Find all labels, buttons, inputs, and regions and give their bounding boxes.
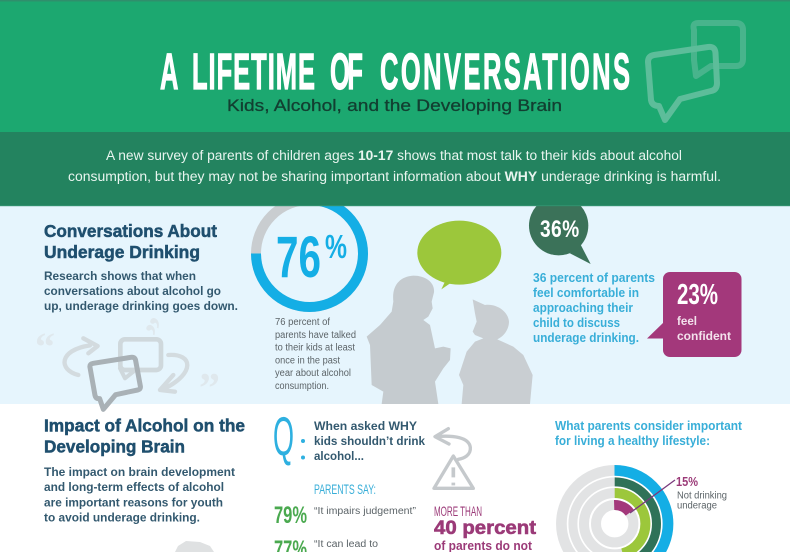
icon: green speech bubble: [417, 221, 501, 289]
panel: header: [0, 0, 790, 132]
caption: 76 percent: once in the past: [275, 356, 340, 366]
intro text: consumption, but they may not be sharing important information about WHY underage drinking is harmful.: [68, 169, 721, 184]
callout: more than 40 percent: 40 percent: [434, 517, 537, 539]
icon: header speech bubbles: [648, 23, 743, 120]
title: OF: [330, 43, 363, 100]
icon: top quote: ”: [137, 311, 181, 347]
heading: conversations: [44, 221, 217, 262]
heading: impact: Impact of Alcohol on the: [44, 416, 245, 436]
icon: conversation illustration: [65, 338, 187, 409]
text: impact description: to avoid underage drinking.: [44, 510, 200, 524]
callout: 23 percent box: [647, 272, 742, 357]
intro text: A new survey of parents of children ages 10-17 shows that most talk to their kids about alcohol: [106, 148, 682, 163]
text: question: alcohol...: [314, 449, 364, 463]
label: 15 percent not drinking underage: Not drinking: [677, 490, 727, 502]
label: 15 percent not drinking underage: 15%: [676, 474, 698, 489]
text: 36 percent description: child to discuss: [533, 316, 620, 330]
stat: 77 percent: [274, 536, 378, 552]
callout: 23 percent box: confident: [677, 329, 731, 343]
label: 15 percent not drinking underage: [630, 474, 727, 513]
label: parents say: PARENTS SAY:: [314, 481, 376, 497]
heading: conversations: Underage Drinking: [44, 242, 200, 262]
text: impact description: The impact on brain development: [44, 465, 235, 479]
callout: 36 percent bubble: 36%: [540, 215, 579, 243]
stat: 79 percent: [274, 502, 416, 529]
label: 15 percent not drinking underage: underage: [677, 500, 717, 512]
text: impact description: [44, 465, 235, 524]
icon: right quote: ”: [199, 366, 220, 412]
illustration: head silhouette top: [175, 541, 214, 552]
panel: intro band: [0, 132, 790, 206]
text: 36 percent description: [533, 271, 655, 345]
text: research: [44, 269, 238, 313]
callout: 36 percent bubble: [528, 206, 591, 264]
intro text: [68, 148, 721, 184]
stat: 77 percent: “It can lead to: [314, 539, 378, 550]
caption: 76 percent: year about alcohol: [275, 368, 351, 379]
text: 36 percent description: 36 percent of parents: [533, 271, 655, 285]
text: impact description: are important reasons for youth: [44, 496, 223, 510]
illustration: parent silhouette: [367, 276, 451, 404]
icon: Q letter: Q: [273, 405, 294, 467]
heading: healthy lifestyle: [555, 419, 743, 448]
text: research: up, underage drinking goes down.: [44, 299, 238, 313]
text: question: [314, 419, 425, 463]
heading: impact: Developing Brain: [44, 436, 185, 456]
title: A: [160, 43, 178, 100]
text: question: kids shouldn’t drink: [314, 434, 425, 448]
caption: 76 percent: parents have talked: [275, 330, 356, 341]
stat: 76 percent: %: [325, 228, 347, 265]
caption: 76 percent: consumption.: [275, 381, 329, 392]
text: question: When asked WHY: [314, 419, 417, 433]
chart: 76 percent ring: [256, 200, 363, 307]
text: impact description: and long-term effects of alcohol: [44, 480, 224, 494]
heading: impact: [44, 416, 245, 456]
panel: conversations about underage drinking: [0, 196, 790, 412]
text: 36 percent description: feel comfortable in: [533, 286, 639, 300]
stat: 76 percent: 76: [276, 225, 321, 290]
heading: conversations: Conversations About: [44, 221, 217, 241]
title: LIFETIME: [192, 43, 315, 100]
icon: return arrow and warning triangle: [434, 429, 473, 488]
callout: 23 percent box: feel: [677, 314, 697, 328]
stat: 79 percent: “It impairs judgement”: [314, 506, 416, 517]
title: CONVERSATIONS: [380, 43, 630, 100]
subtitle: Kids, Alcohol, and the Developing Brain: [227, 97, 562, 115]
stat: 79 percent: 79%: [274, 502, 307, 529]
chart: radial rings: [561, 470, 668, 552]
icon: left quote: “: [35, 324, 55, 369]
title: [160, 43, 630, 100]
text: 36 percent description: approaching their: [533, 301, 633, 315]
caption: 76 percent: [275, 317, 356, 392]
callout: more than 40 percent: MORE THAN: [434, 503, 482, 519]
text: research: conversations about alcohol go: [44, 284, 221, 298]
caption: 76 percent: 76 percent of: [275, 317, 330, 328]
heading: healthy lifestyle: for living a healthy lifestyle:: [555, 434, 710, 448]
caption: 76 percent: to their kids at least: [275, 342, 355, 354]
callout: more than 40 percent: [434, 503, 537, 552]
text: 36 percent description: underage drinking.: [533, 331, 639, 345]
panel: impact of alcohol: [44, 405, 743, 552]
illustration: child silhouette: [459, 299, 533, 404]
heading: healthy lifestyle: What parents consider important: [555, 419, 743, 433]
text: research: Research shows that when: [44, 269, 196, 283]
callout: 23 percent box: 23%: [677, 279, 718, 311]
